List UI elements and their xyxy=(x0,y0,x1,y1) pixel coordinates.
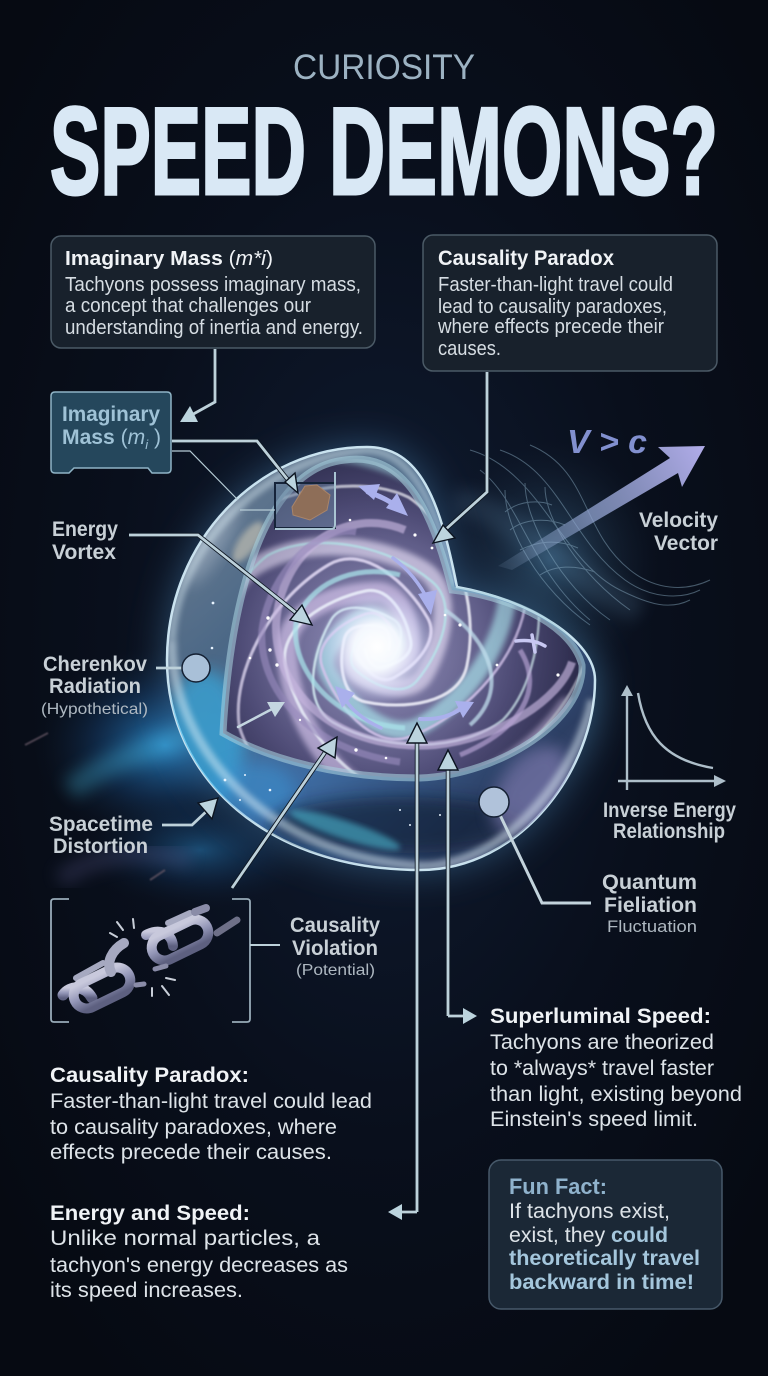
text block: superluminal speed: Tachyons are theorized xyxy=(490,1031,714,1054)
label: causality violation xyxy=(250,914,380,979)
text block: causality paradox: effects precede their causes. xyxy=(50,1141,332,1164)
spacetime grid warp xyxy=(455,445,710,625)
panel body: lead to causality paradoxes, xyxy=(438,296,667,318)
cutaway interior with spiral xyxy=(223,460,582,778)
text block: superluminal speed: Einstein's speed limit. xyxy=(490,1108,698,1131)
flow arrows xyxy=(238,492,545,728)
callout: fun fact: backward in time! xyxy=(509,1271,694,1294)
panel: imaginary mass xyxy=(51,236,375,348)
label: spacetime distortion: Distortion xyxy=(53,835,148,858)
label box: imaginary mass xyxy=(51,392,171,473)
label box: imaginary mass: ) xyxy=(148,426,161,449)
panel body: Faster-than-light travel could xyxy=(438,274,673,296)
title block xyxy=(50,48,718,221)
shell nebula details xyxy=(165,450,592,866)
label: cherenkov radiation: (Hypothetical) xyxy=(41,701,148,718)
panel body xyxy=(437,274,673,360)
eyebrow: curiosity: CURIOSITY xyxy=(293,48,475,87)
label: energy vortex: Energy xyxy=(52,518,118,541)
text block: causality paradox: to causality paradoxes, where xyxy=(50,1116,337,1139)
blue nebula glow xyxy=(25,440,660,910)
label: inverse energy relationship xyxy=(603,799,736,843)
label: cherenkov radiation: Radiation xyxy=(49,675,141,698)
formula: v > c: V > c xyxy=(567,423,647,460)
label: cherenkov radiation: Cherenkov xyxy=(43,653,147,676)
label: quantum fluctuation: Quantum xyxy=(602,871,697,894)
arrow: energy vortex xyxy=(129,535,312,625)
label: causality violation: Violation xyxy=(292,937,378,960)
marker: cherenkov xyxy=(156,654,210,682)
arrow: energy and speed xyxy=(388,723,427,1220)
callout: fun fact: exist, they could xyxy=(509,1224,668,1247)
callout: fun fact: Fun Fact: xyxy=(509,1174,607,1199)
icon: broken chain xyxy=(51,899,250,1022)
text block: causality paradox: Faster-than-light travel could lead xyxy=(50,1090,372,1113)
panel body: causes. xyxy=(438,338,501,360)
lower chain links xyxy=(63,908,237,1013)
callout: fun fact xyxy=(489,1160,722,1309)
velocity vector arrow xyxy=(498,423,705,570)
panel body xyxy=(65,274,363,339)
text block: causality paradox xyxy=(50,1064,372,1164)
cutaway rim xyxy=(223,459,582,778)
label: energy vortex: Vortex xyxy=(52,541,116,564)
stars xyxy=(249,519,560,759)
label box: imaginary mass: Imaginary xyxy=(62,403,160,426)
text block: energy and speed: tachyon's energy decreases as xyxy=(50,1254,348,1277)
arrow: superluminal speed xyxy=(438,750,477,1024)
label box: imaginary mass: Mass (m xyxy=(62,426,145,449)
label: energy vortex xyxy=(52,518,118,564)
arrow: label to mass sample xyxy=(172,441,298,510)
label: cherenkov radiation xyxy=(41,653,148,718)
panel heading: Causality Paradox xyxy=(438,247,614,270)
panel body: where effects precede their xyxy=(437,316,664,338)
main title xyxy=(50,83,718,221)
label: quantum fluctuation: Fieliation xyxy=(604,894,697,917)
panel heading: Imaginary Mass (m*i) xyxy=(65,248,273,270)
label: velocity vector: Velocity xyxy=(639,509,718,532)
panel body: Tachyons possess imaginary mass, xyxy=(65,274,361,296)
arrow: panel to label xyxy=(180,349,215,422)
label: spacetime distortion xyxy=(49,813,153,858)
diagram: cutaway sphere xyxy=(150,402,603,902)
text block: superluminal speed xyxy=(490,1005,742,1131)
text block: superluminal speed: Superluminal Speed: xyxy=(490,1005,711,1028)
chain bracket xyxy=(51,899,250,1022)
text block: energy and speed: Unlike normal particles, a xyxy=(50,1227,320,1250)
text block: energy and speed: its speed increases. xyxy=(50,1279,243,1302)
label box: imaginary mass: i xyxy=(145,437,149,452)
label: quantum fluctuation xyxy=(602,871,697,936)
label: inverse energy relationship: Inverse Energy xyxy=(603,799,736,822)
outer purple bands xyxy=(262,523,572,762)
text block: superluminal speed: than light, existing beyond xyxy=(490,1083,742,1106)
arrow: spacetime distortion xyxy=(162,798,218,825)
label: inverse energy relationship: Relationship xyxy=(613,820,725,843)
sphere glow halo xyxy=(167,447,595,870)
label: causality violation: (Potential) xyxy=(296,962,375,979)
label: velocity vector xyxy=(639,509,718,555)
text block: superluminal speed: to *always* travel faster xyxy=(490,1057,714,1080)
label: velocity vector: Vector xyxy=(654,532,718,555)
panel: causality paradox top xyxy=(423,235,717,371)
shell stars xyxy=(211,602,441,826)
label: spacetime distortion: Spacetime xyxy=(49,813,153,836)
upper chain links xyxy=(146,932,173,946)
inset: imaginary mass sample xyxy=(275,472,335,529)
text block: energy and speed: Energy and Speed: xyxy=(50,1202,250,1225)
panel body: a concept that challenges our xyxy=(65,295,311,317)
spark lines xyxy=(110,919,175,996)
arrow: paradox panel to sphere xyxy=(433,372,487,543)
marker: quantum fluctuation xyxy=(479,787,591,903)
main title: SPEED xyxy=(50,83,306,221)
text block: causality paradox: Causality Paradox: xyxy=(50,1064,249,1087)
outer fade xyxy=(223,459,582,774)
callout: fun fact: If tachyons exist, xyxy=(509,1200,670,1223)
label: causality violation: Causality xyxy=(290,914,380,937)
callout: fun fact: theoretically travel xyxy=(509,1247,700,1270)
sphere shell xyxy=(167,447,595,870)
text block: energy and speed xyxy=(50,1202,348,1302)
panel body: understanding of inertia and energy. xyxy=(65,317,363,339)
chart: inverse energy xyxy=(618,685,726,790)
label: quantum fluctuation: Fluctuation xyxy=(607,917,697,936)
arrow: causality violation to sphere xyxy=(232,737,337,888)
flow arrowheads xyxy=(267,484,474,718)
